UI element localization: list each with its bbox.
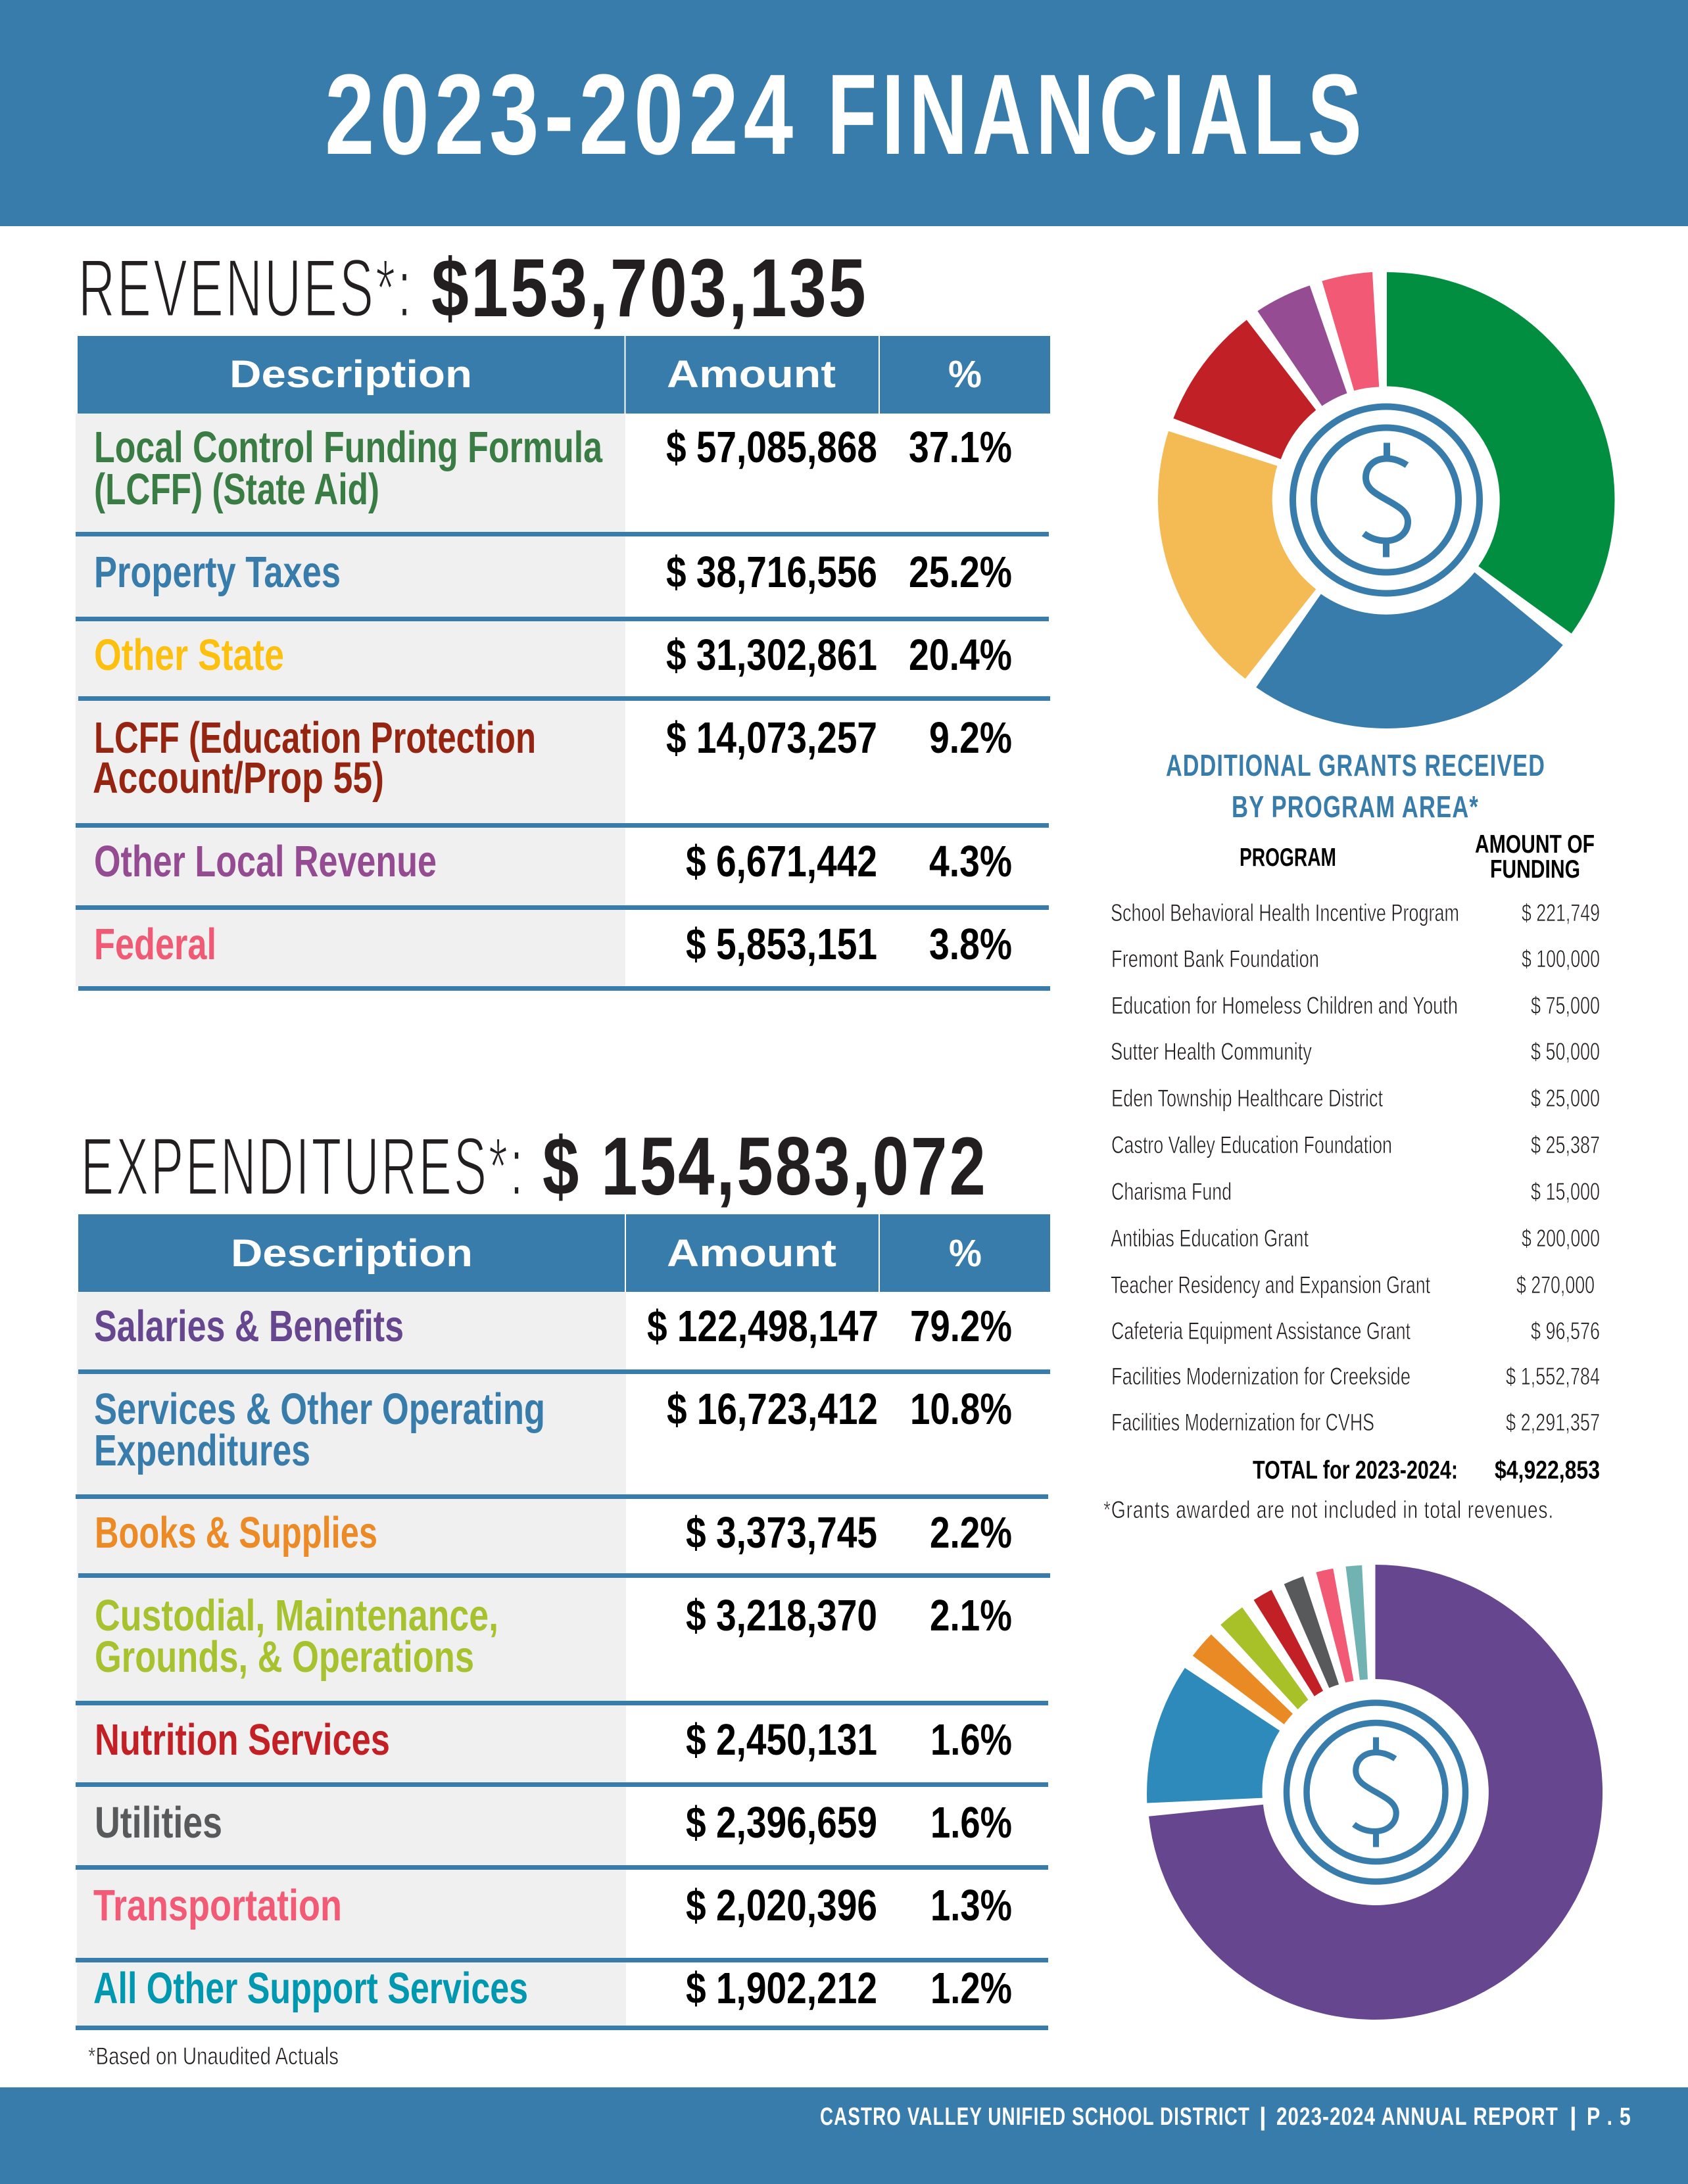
row: Property Taxes: Property Taxes (94, 548, 341, 597)
row: Federal: 3.8% (929, 920, 1012, 969)
heading: expenditures total: $ 154,583,072 (543, 1121, 988, 1212)
row: Books & Supplies: 2.2% (930, 1508, 1012, 1557)
row: Other State: 20.4% (909, 630, 1012, 680)
row: Property Taxes (94, 548, 1012, 597)
footer text: CASTRO VALLEY UNIFIED SCHOOL DISTRICT (820, 2103, 1250, 2131)
row: Custodial, Maintenance, Grounds & Operations: $ 3,218,370 (686, 1591, 877, 1640)
row: All Other Support Services: $ 1,902,212 (686, 1964, 877, 2013)
row: Custodial, Maintenance, Grounds & Operations (95, 1591, 1012, 1682)
panel: revenues (76, 243, 1050, 991)
heading: revenues total: REVENUES*: (78, 243, 414, 334)
row: LCFF Education Protection Account: 9.2% (929, 713, 1012, 763)
heading: revenues total (78, 243, 868, 334)
grants list: Eden Township Healthcare District (1111, 1085, 1384, 1112)
row: Nutrition Services: Nutrition Services (95, 1715, 390, 1765)
grants total: $4,922,853 (1495, 1456, 1600, 1484)
row: Custodial, Maintenance, Grounds & Operations: Custodial, Maintenance, (95, 1591, 498, 1640)
revenue donut chart (1158, 272, 1614, 728)
grants column headers: AMOUNT OF (1475, 830, 1595, 859)
row: Books & Supplies: Books & Supplies (95, 1508, 377, 1557)
grants list: $ 270,000 (1516, 1271, 1595, 1298)
expenditures table header: % (949, 1232, 982, 1275)
row: LCFF Education Protection Account (93, 713, 1012, 803)
row: Property Taxes: 25.2% (909, 548, 1012, 597)
icon: dollar coin (1286, 1703, 1465, 1882)
grants list: Sutter Health Community (1111, 1038, 1312, 1065)
grants list: $ 25,000 (1531, 1085, 1600, 1112)
grants list: $ 2,291,357 (1506, 1409, 1600, 1436)
row: Other Local Revenue (94, 837, 1012, 886)
grants column headers (1240, 830, 1595, 884)
expenditures table header (78, 1214, 1050, 1292)
footnote: unaudited actuals: *Based on Unaudited Actuals (88, 2043, 339, 2070)
row: Local Control Funding Formula (94, 423, 1012, 514)
row: LCFF Education Protection Account: LCFF (Education Protection (94, 713, 536, 763)
row: All Other Support Services: All Other Support Services (93, 1964, 528, 2013)
row: Local Control Funding Formula: Local Control Funding Formula (94, 423, 603, 472)
grants heading: BY PROGRAM AREA* (1232, 790, 1479, 824)
footer text: | (1570, 2103, 1577, 2131)
row: Other Local Revenue: 4.3% (929, 837, 1012, 886)
grants list: Castro Valley Education Foundation (1111, 1131, 1392, 1158)
icon: dollar coin (1293, 406, 1480, 593)
row: LCFF Education Protection Account: $ 14,073,257 (666, 713, 877, 763)
row: Custodial, Maintenance, Grounds & Operations: Grounds, & Operations (95, 1632, 474, 1682)
grants heading (1166, 748, 1545, 824)
footer band (0, 2087, 1688, 2184)
grants list (1111, 899, 1600, 1436)
row: Services & Other Operating Expenditures: Expenditures (94, 1426, 310, 1475)
row: Federal: Federal (94, 920, 216, 969)
row: All Other Support Services: 1.2% (930, 1964, 1012, 2013)
grants list: Cafeteria Equipment Assistance Grant (1111, 1318, 1411, 1344)
grants list: $ 96,576 (1531, 1318, 1600, 1344)
row: Salaries & Benefits (94, 1302, 1012, 1351)
grants list: $ 15,000 (1531, 1178, 1600, 1205)
footer text: | (1259, 2103, 1266, 2131)
row: Services & Other Operating Expenditures (94, 1385, 1012, 1475)
grants list: $ 200,000 (1522, 1225, 1600, 1252)
revenues table header: Description (229, 353, 472, 396)
row: Nutrition Services: 1.6% (930, 1715, 1012, 1765)
grants list: School Behavioral Health Incentive Program (1111, 899, 1459, 926)
row: Nutrition Services: $ 2,450,131 (686, 1715, 877, 1765)
row: Utilities: Utilities (95, 1798, 222, 1847)
row: Transportation: $ 2,020,396 (686, 1881, 877, 1930)
row: Transportation (93, 1881, 1012, 1930)
grants heading: ADDITIONAL GRANTS RECEIVED (1166, 748, 1545, 782)
title: 2023-2024 (325, 50, 798, 178)
row: Books & Supplies (95, 1508, 1012, 1557)
row: Utilities: 1.6% (930, 1798, 1012, 1847)
grants list: $ 25,387 (1531, 1131, 1600, 1158)
row: Nutrition Services (95, 1715, 1012, 1765)
revenues table header (78, 336, 1050, 414)
heading: expenditures total: EXPENDITURES*: (81, 1122, 525, 1212)
footer text: 2023-2024 ANNUAL REPORT (1276, 2103, 1558, 2131)
row: LCFF Education Protection Account: Account/Prop 55) (93, 753, 384, 803)
row: Other Local Revenue: $ 6,671,442 (686, 837, 877, 886)
row: Utilities (95, 1798, 1012, 1847)
grants list: Teacher Residency and Expansion Grant (1111, 1271, 1431, 1298)
row: Transportation: Transportation (93, 1881, 342, 1930)
row: Services & Other Operating Expenditures: Services & Other Operating (94, 1385, 545, 1434)
row: Books & Supplies: $ 3,373,745 (686, 1508, 877, 1557)
header band with title (0, 0, 1688, 226)
row: Local Control Funding Formula: $ 57,085,868 (666, 423, 877, 472)
row: Local Control Funding Formula: 37.1% (909, 423, 1012, 472)
row: Services & Other Operating Expenditures: $ 16,723,412 (667, 1385, 878, 1434)
title (325, 50, 1366, 178)
row: Other State (94, 630, 1012, 680)
grants list: Antibias Education Grant (1111, 1225, 1309, 1252)
grants list: Fremont Bank Foundation (1111, 945, 1319, 972)
grants list: Education for Homeless Children and Youth (1111, 992, 1458, 1019)
row: Utilities: $ 2,396,659 (686, 1798, 877, 1847)
row: Salaries & Benefits: 79.2% (910, 1302, 1012, 1351)
row: Transportation: 1.3% (930, 1881, 1012, 1930)
row: Other Local Revenue: Other Local Revenue (94, 837, 437, 886)
grants list: $ 100,000 (1522, 945, 1600, 972)
row: Services & Other Operating Expenditures: 10.8% (910, 1385, 1012, 1434)
row: Other State: Other State (94, 630, 284, 680)
panel: expenditures (76, 1121, 1050, 2070)
grants column headers: FUNDING (1490, 855, 1580, 884)
grants footnote: *Grants awarded are not included in total revenues. (1103, 1496, 1554, 1523)
grants list: Facilities Modernization for Creekside (1111, 1363, 1411, 1390)
expenditures table header: Description (231, 1232, 473, 1275)
row: Federal: $ 5,853,151 (686, 920, 877, 969)
grants list: $ 75,000 (1531, 992, 1600, 1019)
row: Other State: $ 31,302,861 (666, 630, 877, 680)
panel: additional grants (1103, 748, 1600, 1523)
grants list: $ 221,749 (1522, 899, 1600, 926)
row: Salaries & Benefits: $ 122,498,147 (647, 1302, 879, 1351)
heading: revenues total: $153,703,135 (431, 243, 868, 334)
grants list: Facilities Modernization for CVHS (1111, 1409, 1374, 1436)
row: Federal (94, 920, 1012, 969)
expenditures donut chart (1147, 1565, 1603, 2020)
row: Property Taxes: $ 38,716,556 (666, 548, 877, 597)
row: Custodial, Maintenance, Grounds & Operations: 2.1% (930, 1591, 1012, 1640)
expenditures table header: Amount (667, 1232, 836, 1275)
grants list: $ 50,000 (1531, 1038, 1600, 1065)
revenues table header: % (948, 353, 982, 396)
row: All Other Support Services (93, 1964, 1012, 2013)
footer text: P . 5 (1587, 2103, 1631, 2131)
grants list: Charisma Fund (1111, 1178, 1232, 1205)
row: Local Control Funding Formula: (LCFF) (State Aid) (94, 465, 379, 514)
grants column headers: PROGRAM (1240, 843, 1336, 872)
grants total: TOTAL for 2023-2024: (1253, 1456, 1458, 1484)
revenues table header: Amount (667, 353, 836, 396)
grants list: $ 1,552,784 (1506, 1363, 1600, 1390)
row: Salaries & Benefits: Salaries & Benefits (94, 1302, 404, 1351)
title: FINANCIALS (827, 50, 1366, 178)
